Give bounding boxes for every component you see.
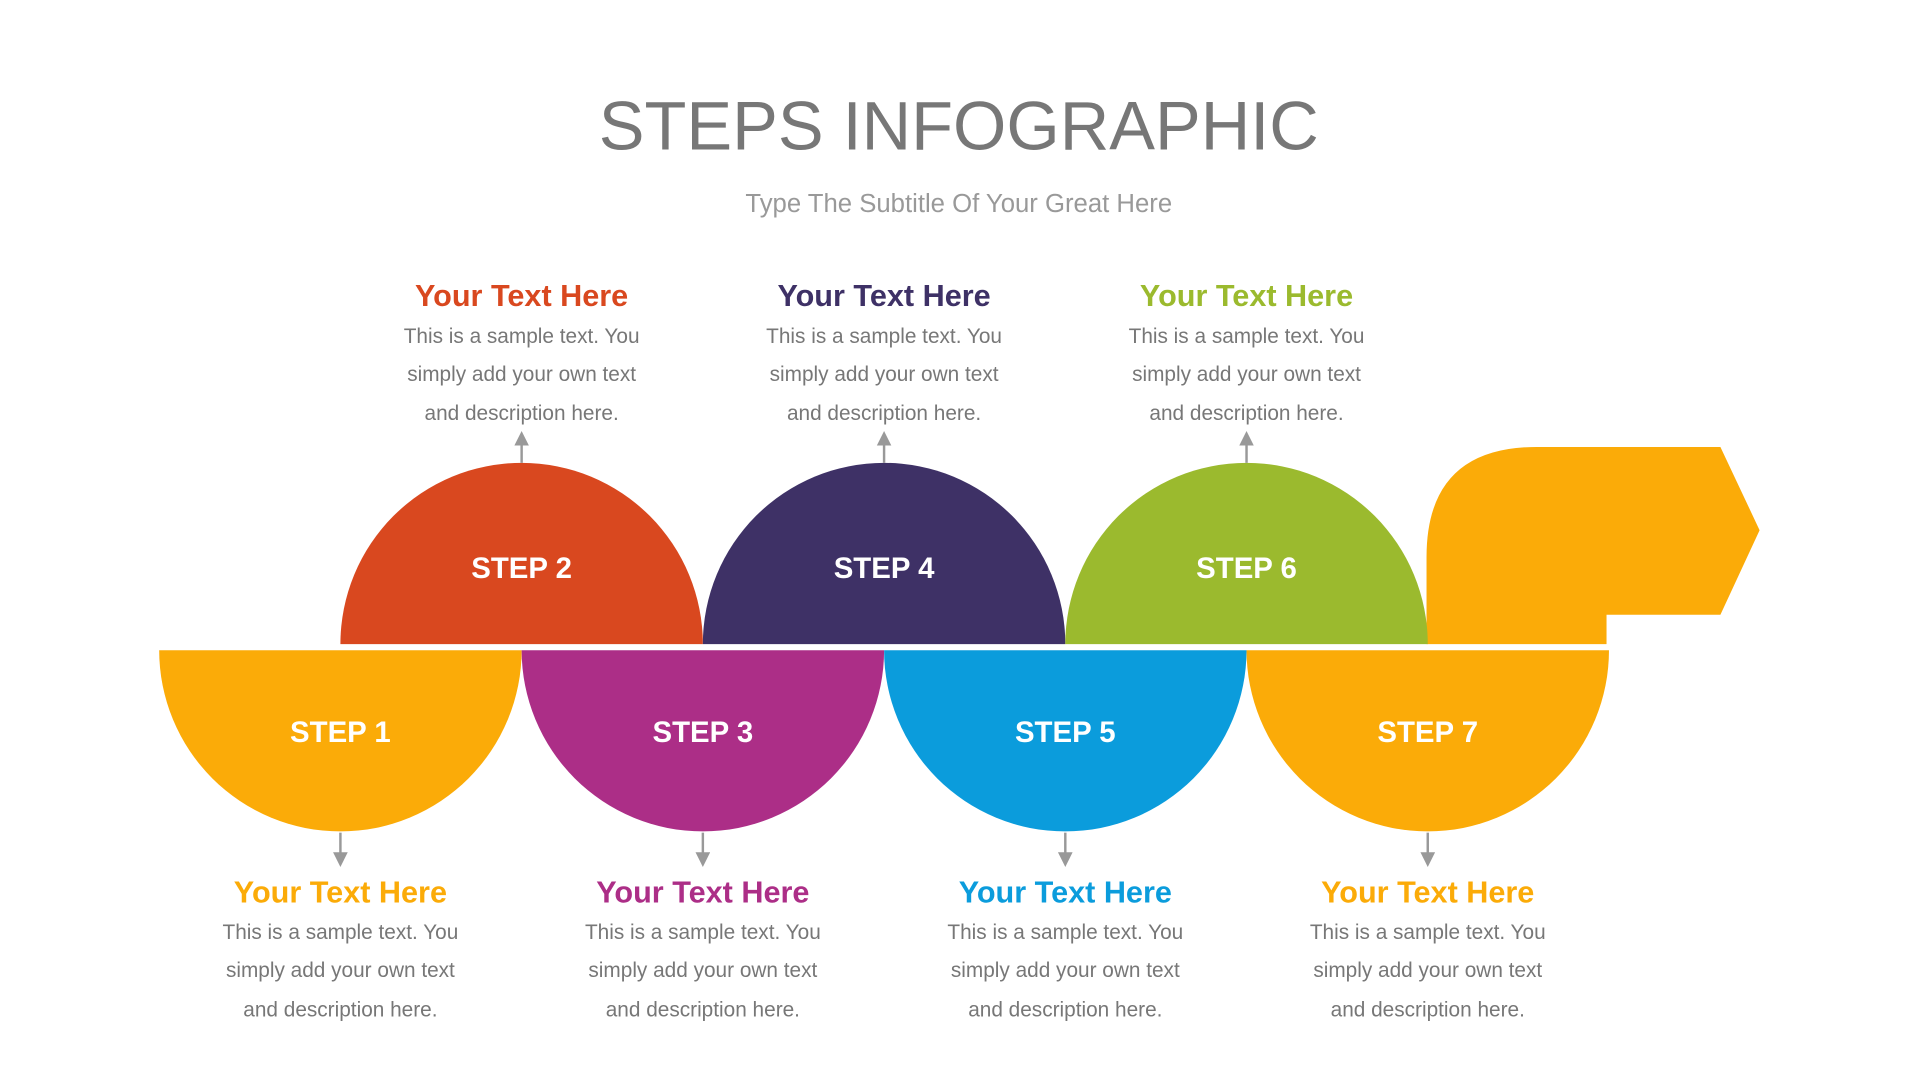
text block: step 1: Your Text Here (234, 875, 447, 909)
step 4: STEP 4 (834, 552, 935, 585)
text block: step 2: Your Text Here (415, 279, 628, 313)
text block: step 3: Your Text Here (596, 875, 809, 909)
text block: step 3: This is a sample text. You (585, 921, 821, 944)
step 4 (703, 463, 1065, 644)
text block: step 4: and description here. (787, 402, 981, 425)
text block: step 2: This is a sample text. You (404, 325, 640, 348)
step 3 (522, 650, 884, 831)
text block: step 3 (585, 875, 821, 1021)
step 2: STEP 2 (471, 552, 572, 585)
text block: step 1: and description here. (243, 998, 438, 1021)
text block: step 5: and description here. (968, 998, 1162, 1021)
text block: step 7: simply add your own text (1313, 959, 1542, 982)
text block: step 3: and description here. (606, 998, 800, 1021)
text block: step 5: Your Text Here (959, 875, 1172, 909)
subtitle: Type The Subtitle Of Your Great Here (745, 190, 1172, 218)
text block: step 5: This is a sample text. You (947, 921, 1183, 944)
step 7 (1247, 650, 1609, 831)
text block: step 6: This is a sample text. You (1129, 325, 1364, 348)
text block: step 7: and description here. (1331, 998, 1525, 1021)
text block: step 6: simply add your own text (1132, 363, 1361, 386)
text block: step 1: simply add your own text (226, 959, 455, 982)
text block: step 2 (404, 279, 640, 425)
text block: step 4: Your Text Here (777, 279, 991, 313)
text block: step 2: simply add your own text (407, 363, 636, 386)
text block: step 7: Your Text Here (1321, 875, 1534, 909)
text block: step 6: and description here. (1149, 402, 1344, 425)
step 1: STEP 1 (290, 716, 391, 749)
text block: step 2: and description here. (425, 402, 619, 425)
text block: step 5: simply add your own text (951, 959, 1180, 982)
text block: step 4: simply add your own text (770, 363, 999, 386)
arrow shape (1427, 447, 1760, 644)
text block: step 4: This is a sample text. You (766, 325, 1002, 348)
text block: step 1 (222, 875, 458, 1021)
step 6 (1065, 463, 1428, 644)
text block: step 4 (766, 279, 1002, 425)
text block: step 7: This is a sample text. You (1310, 921, 1546, 944)
text block: step 1: This is a sample text. You (222, 921, 458, 944)
text block: step 6: Your Text Here (1140, 279, 1353, 313)
text block: step 6 (1129, 279, 1364, 425)
step 6: STEP 6 (1196, 552, 1297, 585)
step 2 (340, 463, 703, 644)
step 1 (159, 650, 522, 831)
text block: step 5 (947, 875, 1183, 1021)
connector arrows (340, 438, 1428, 860)
step 5: STEP 5 (1015, 716, 1116, 749)
step 7: STEP 7 (1377, 716, 1478, 749)
text block: step 3: simply add your own text (588, 959, 818, 982)
step 5 (884, 650, 1247, 831)
step 3: STEP 3 (653, 716, 753, 749)
title: STEPS INFOGRAPHIC (599, 87, 1319, 164)
text block: step 7 (1310, 875, 1546, 1021)
